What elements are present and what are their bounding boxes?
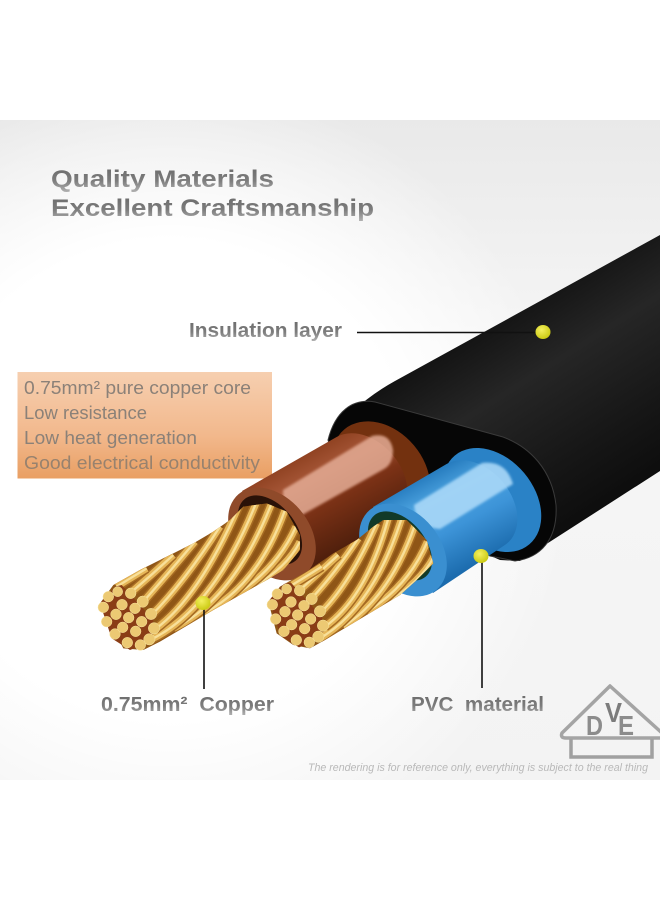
icon: VDE mark: D: [586, 710, 603, 741]
background panel: [0, 120, 660, 780]
pointer: copper: [196, 596, 210, 689]
label: copper: 0.75mm² Copper: [101, 694, 274, 716]
pointer: PVC: [474, 549, 488, 688]
footnote: The rendering is for reference only, everything is subject to the real thing: [308, 762, 649, 774]
icon: VDE mark: V: [605, 697, 622, 728]
copper strands: blue wire: [266, 520, 434, 648]
copper strands: brown wire: [98, 503, 300, 651]
pointer: insulation layer: [357, 325, 550, 339]
label: insulation layer: Insulation layer: [189, 320, 342, 342]
icon: VDE mark: [562, 686, 660, 757]
outer black cable jacket: [328, 235, 660, 561]
callout: copper core features: Low resistance: [24, 402, 147, 423]
callout: copper core features: [18, 372, 272, 478]
brown wire: [210, 402, 451, 598]
title: [51, 166, 374, 222]
title: Excellent Craftsmanship: [51, 195, 374, 222]
title: Quality Materials: [51, 166, 274, 193]
label: PVC material: PVC material: [411, 694, 544, 716]
icon: VDE mark: E: [618, 710, 634, 741]
callout: copper core features: Good electrical conductivity: [24, 452, 261, 473]
callout: copper core features: 0.75mm² pure copper core: [24, 377, 251, 398]
blue wire: [341, 429, 561, 614]
callout: copper core features: Low heat generation: [24, 427, 197, 448]
